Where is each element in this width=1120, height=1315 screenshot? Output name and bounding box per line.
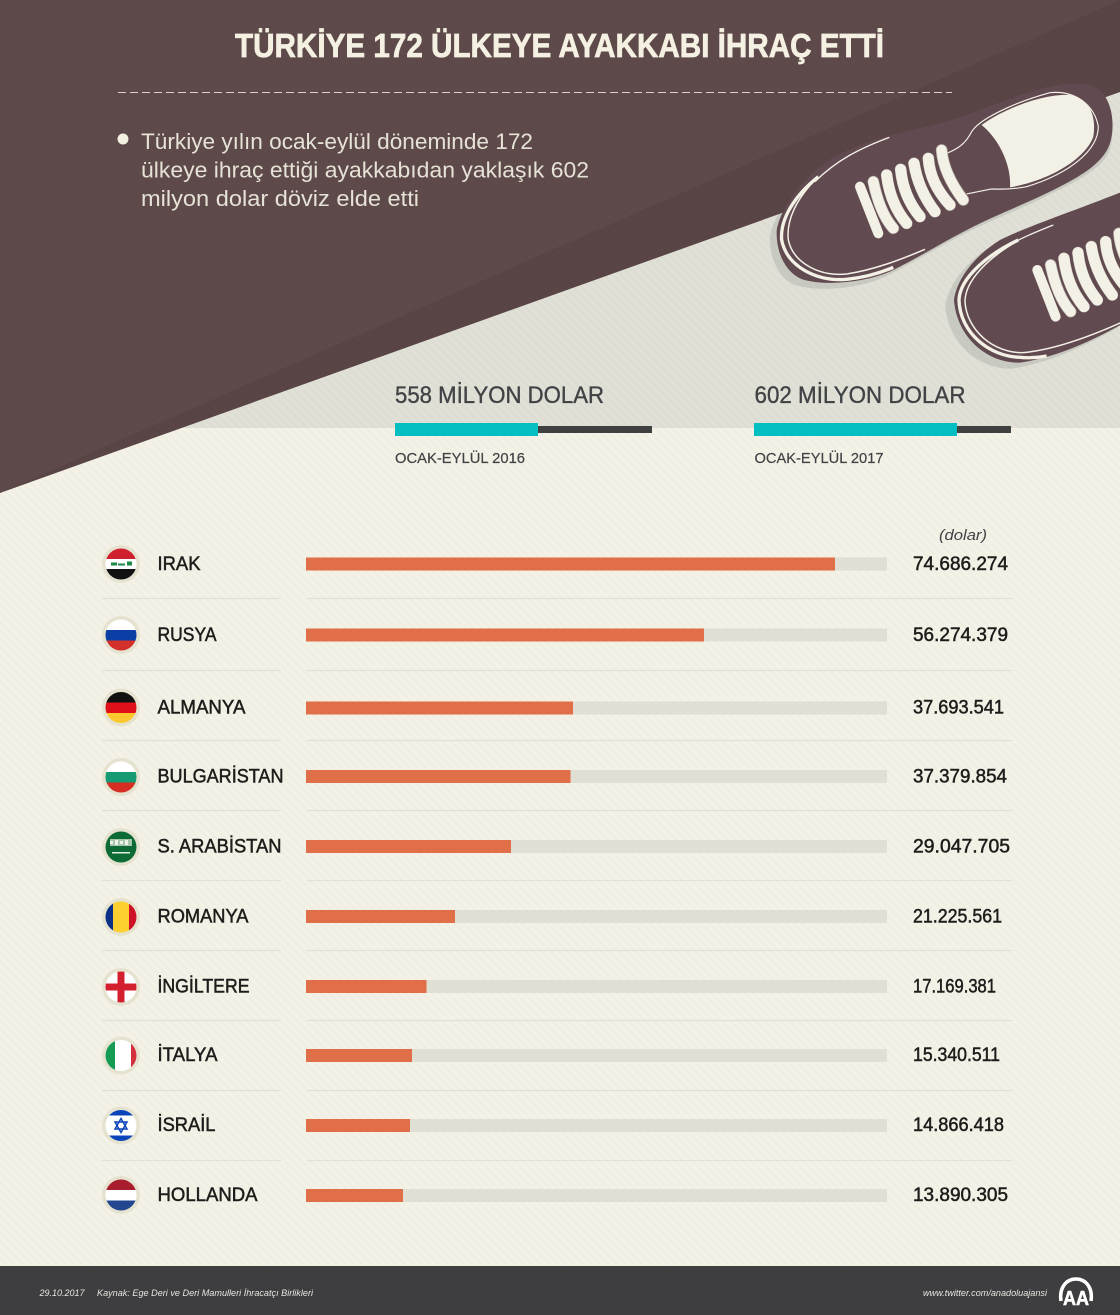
flag: Almanya bbox=[102, 688, 140, 726]
icon: shoe bottom bbox=[954, 190, 1120, 363]
row: Almanya: ALMANYA bbox=[158, 698, 246, 718]
stat: 2016: 558 MİLYON DOLAR bbox=[395, 382, 604, 409]
bullet summary text: Türkiye yılın ocak-eylül döneminde 172 bbox=[141, 129, 533, 154]
stat: 2016: OCAK-EYLÜL 2016 bbox=[395, 449, 525, 467]
row: S. Arabistan bbox=[102, 828, 1010, 866]
row: Hollanda: 13.890.305 bbox=[913, 1185, 1008, 1206]
flag: Romanya bbox=[102, 898, 140, 936]
light grey band behind the statistics bbox=[0, 88, 1120, 428]
flag: S. Arabistan bbox=[102, 828, 140, 866]
row: İngiltere: İNGİLTERE bbox=[158, 976, 250, 998]
row: Irak bbox=[102, 545, 1008, 583]
row: Hollanda: HOLLANDA bbox=[158, 1185, 258, 1206]
row: Irak: IRAK bbox=[158, 554, 201, 575]
row: Rusya: 56.274.379 bbox=[913, 625, 1008, 646]
row: Bulgaristan: 37.379.854 bbox=[913, 766, 1007, 788]
row: Rusya: RUSYA bbox=[158, 625, 217, 646]
row: İsrail bbox=[102, 1106, 1004, 1144]
flag: İtalya bbox=[102, 1036, 140, 1074]
bullet summary text bbox=[118, 129, 589, 211]
flag: Hollanda bbox=[102, 1176, 140, 1214]
stat: 2017 bbox=[754, 382, 1011, 467]
stat: 2017: OCAK-EYLÜL 2017 bbox=[754, 449, 884, 467]
flag: İngiltere bbox=[102, 968, 140, 1006]
row: S. Arabistan: 29.047.705 bbox=[913, 836, 1010, 858]
flag: Bulgaristan bbox=[102, 758, 140, 796]
footer url: www.twitter.com/anadoluajansi bbox=[923, 1288, 1048, 1299]
row: Irak: 74.686.274 bbox=[913, 554, 1008, 575]
row: İsrail: İSRAİL bbox=[158, 1115, 216, 1136]
flag: İsrail bbox=[102, 1106, 140, 1144]
footer date: 29.10.2017 bbox=[39, 1288, 85, 1299]
stat: 2017: 602 MİLYON DOLAR bbox=[754, 382, 966, 409]
title: TÜRKİYE 172 ÜLKEYE AYAKKABI İHRAÇ ETTİ bbox=[235, 27, 884, 64]
row: Bulgaristan bbox=[102, 758, 1007, 796]
icon: AA logo: AA bbox=[1063, 1288, 1089, 1310]
row: Almanya bbox=[102, 688, 1004, 726]
row: Romanya: ROMANYA bbox=[158, 906, 249, 928]
stat: 2016 bbox=[395, 382, 652, 467]
shoe shadows bbox=[770, 90, 1118, 369]
row: Romanya bbox=[102, 898, 1002, 936]
row: Bulgaristan: BULGARİSTAN bbox=[158, 766, 284, 788]
row: İngiltere bbox=[102, 968, 996, 1006]
row: Romanya: 21.225.561 bbox=[913, 906, 1002, 928]
flag: Rusya bbox=[102, 616, 140, 654]
row: Rusya bbox=[102, 616, 1008, 654]
footer bbox=[0, 1266, 1120, 1315]
footer source: Kaynak: Ege Deri ve Deri Mamulleri İhracatçı Birlikleri bbox=[97, 1288, 314, 1299]
dark header background bbox=[0, 0, 1120, 493]
icon: shoe top bbox=[777, 84, 1113, 283]
row: Almanya: 37.693.541 bbox=[913, 698, 1004, 718]
bullet summary text: milyon dolar döviz elde etti bbox=[141, 186, 419, 211]
row: İsrail: 14.866.418 bbox=[913, 1115, 1004, 1136]
row: İtalya: İTALYA bbox=[158, 1045, 218, 1066]
unit label: (dolar) bbox=[939, 527, 987, 544]
row: İngiltere: 17.169.381 bbox=[913, 976, 996, 998]
row: S. Arabistan: S. ARABİSTAN bbox=[158, 836, 282, 858]
row: Hollanda bbox=[102, 1176, 1008, 1214]
flag: Irak bbox=[102, 545, 140, 583]
row: İtalya bbox=[102, 1036, 1000, 1074]
icon: AA logo bbox=[1061, 1279, 1091, 1310]
row: İtalya: 15.340.511 bbox=[913, 1045, 1000, 1066]
bullet summary text: ülkeye ihraç ettiği ayakkabıdan yaklaşık 602 bbox=[141, 158, 589, 182]
